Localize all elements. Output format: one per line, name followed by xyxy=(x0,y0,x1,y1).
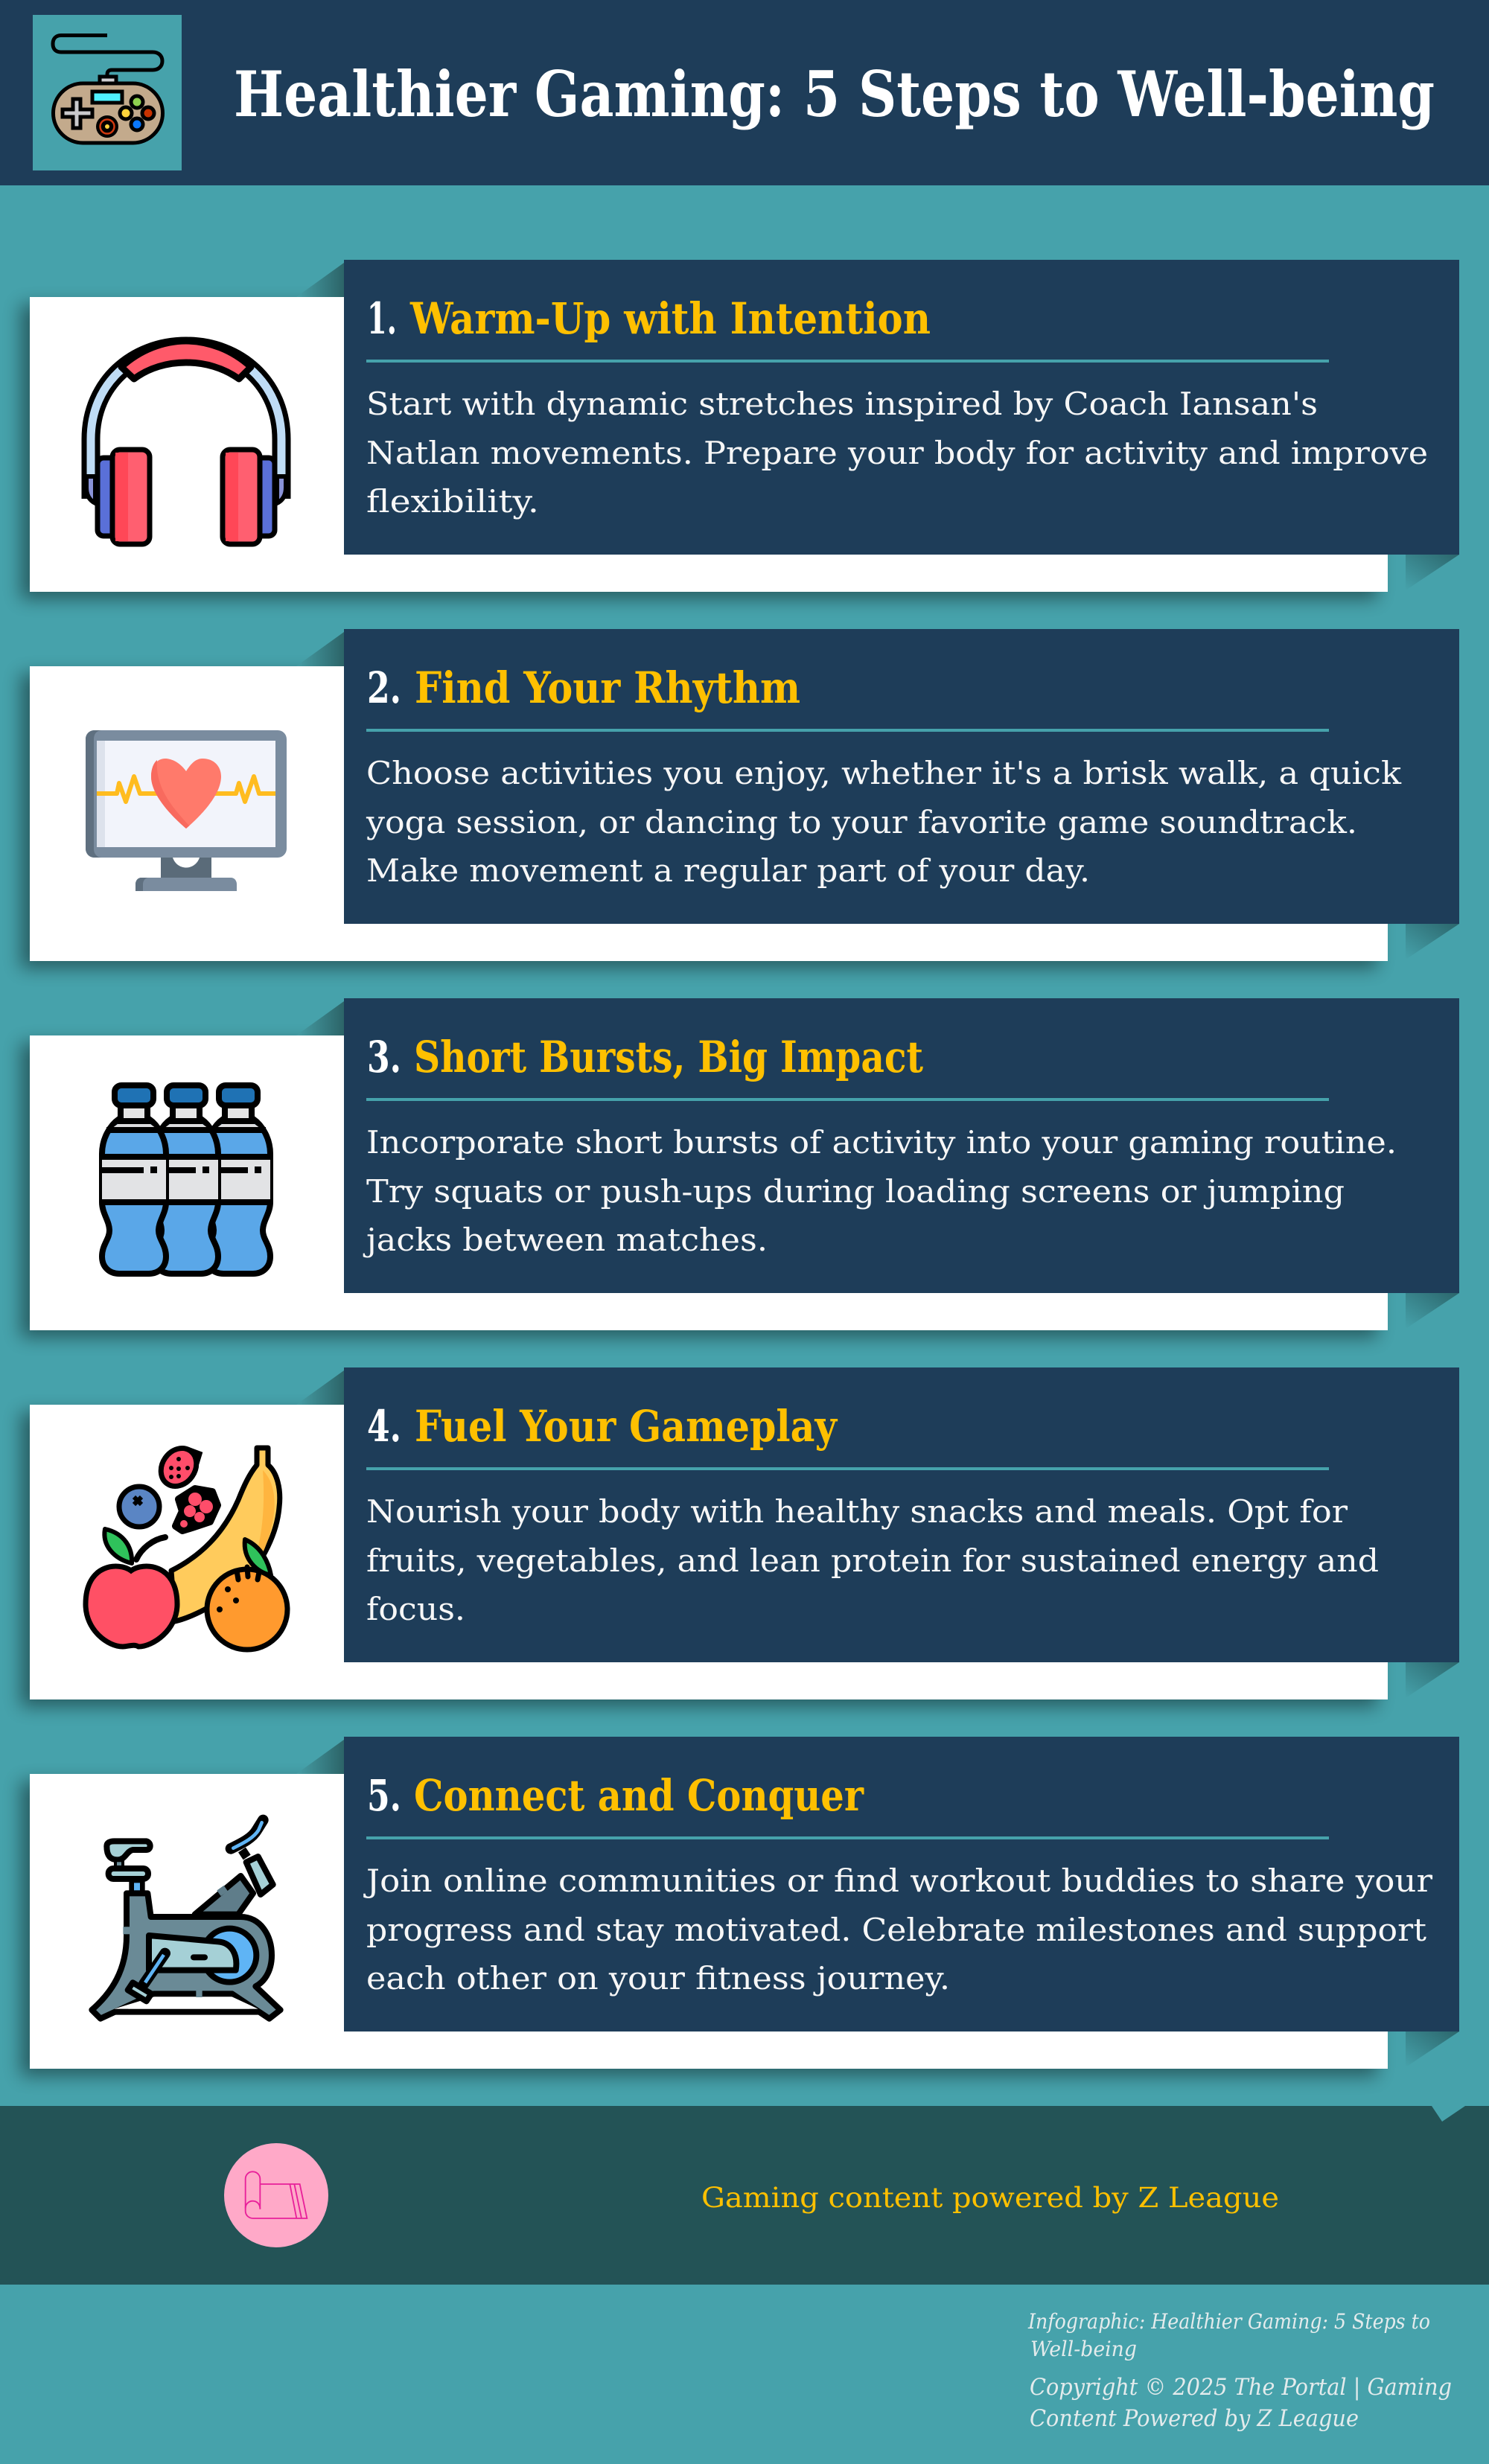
icon: water bottles xyxy=(102,1085,270,1274)
footer band xyxy=(0,2106,1489,2285)
body text: flexibility. xyxy=(366,483,539,520)
body text: Incorporate short bursts of activity into your gaming routine. xyxy=(366,1124,1397,1161)
icon: fruits xyxy=(86,1441,287,1650)
heading: Connect and Conquer xyxy=(414,1770,864,1821)
body text: yoga session, or dancing to your favorite game soundtrack. xyxy=(366,804,1357,840)
header bar xyxy=(0,0,1489,185)
body text: jacks between matches. xyxy=(363,1222,768,1258)
icon: headphones xyxy=(86,341,286,544)
heading: Fuel Your Gameplay xyxy=(415,1401,838,1452)
panel: step 3 xyxy=(21,998,1459,1338)
body text xyxy=(366,1493,1379,1627)
icon: game controller xyxy=(33,15,182,170)
heading: Find Your Rhythm xyxy=(415,663,800,713)
body text xyxy=(366,386,1428,520)
raspberry xyxy=(176,1489,217,1531)
panel: step 2 xyxy=(21,629,1459,968)
heading: 3. xyxy=(367,1032,401,1082)
icon: exercise bike xyxy=(92,1820,281,2019)
credits text xyxy=(1027,2309,1452,2432)
body text: focus. xyxy=(366,1591,465,1627)
icon: yoga mat xyxy=(224,2143,328,2247)
body text xyxy=(363,1124,1397,1258)
body text: each other on your fitness journey. xyxy=(366,1960,950,1997)
heading: 1. xyxy=(367,293,397,344)
heading: 4. xyxy=(367,1401,401,1452)
icon: heart monitor xyxy=(86,730,287,891)
body text: Make movement a regular part of your day. xyxy=(366,852,1090,889)
body text: Choose activities you enjoy, whether it's a brisk walk, a quick xyxy=(366,755,1402,791)
heading: 2. xyxy=(367,663,401,713)
body text: Join online communities or find workout buddies to share your xyxy=(363,1863,1433,1899)
body text: Start with dynamic stretches inspired by Coach Iansan's xyxy=(366,386,1318,422)
heading: Warm-Up with Intention xyxy=(409,293,931,344)
credits text: Infographic: Healthier Gaming: 5 Steps to xyxy=(1027,2309,1430,2334)
panel: step 1 xyxy=(21,260,1459,599)
body text: Natlan movements. Prepare your body for activity and improve xyxy=(366,435,1428,471)
body text xyxy=(363,1863,1433,1997)
body text: fruits, vegetables, and lean protein for sustained energy and xyxy=(366,1542,1379,1579)
body text: Try squats or push-ups during loading screens or jumping xyxy=(366,1173,1345,1210)
panel: step 5 xyxy=(21,1737,1459,2076)
credits text: Copyright © 2025 The Portal | Gaming xyxy=(1030,2374,1452,2401)
body text xyxy=(366,755,1402,889)
footer tagline: Gaming content powered by Z League xyxy=(701,2182,1279,2214)
credits text: Well-being xyxy=(1030,2337,1137,2361)
body text: progress and stay motivated. Celebrate milestones and support xyxy=(366,1912,1426,1948)
panel: step 4 xyxy=(21,1367,1459,1707)
heading: 5. xyxy=(367,1770,401,1821)
heading: Short Bursts, Big Impact xyxy=(414,1032,923,1082)
body text: Nourish your body with healthy snacks and meals. Opt for xyxy=(366,1493,1348,1530)
credits text: Content Powered by Z League xyxy=(1030,2405,1359,2432)
